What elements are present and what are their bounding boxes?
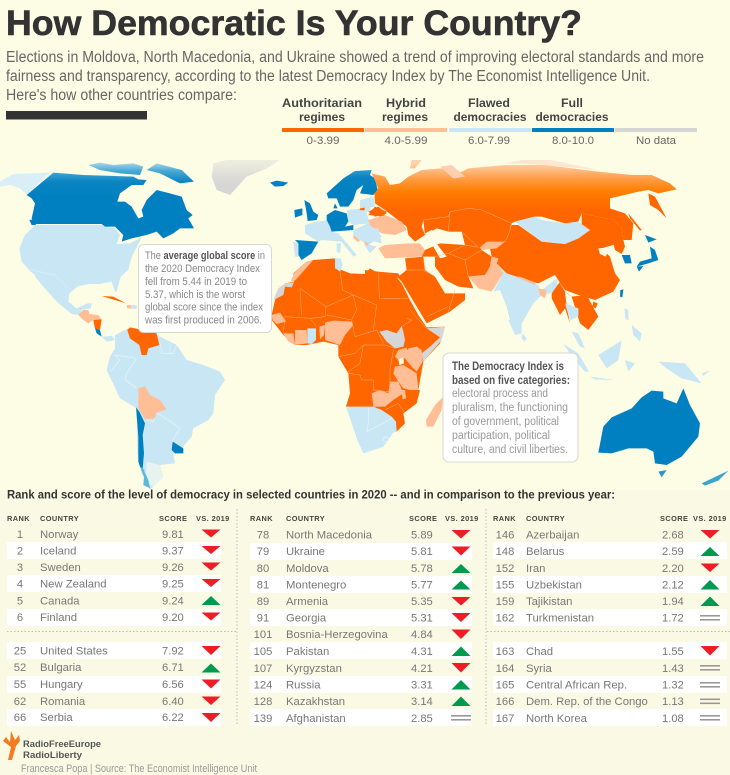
row: Ukraine: 79 xyxy=(257,546,269,558)
row: Finland xyxy=(7,609,221,626)
row: Uzbekistan: 155 xyxy=(496,580,514,592)
row: Bosnia-Herzegovina: Bosnia-Herzegovina xyxy=(286,629,388,641)
row: New Zealand: New Zealand xyxy=(40,578,107,590)
row: Kyrgyzstan xyxy=(254,663,470,675)
row: Ukraine xyxy=(250,543,472,560)
legend: authoritarian regimes: Authoritarian xyxy=(282,98,362,110)
row: Sweden: 3 xyxy=(17,562,23,574)
callout: average global score: fell from 5.44 in 2019 to xyxy=(145,276,247,288)
row: Norway: 1 xyxy=(17,529,23,541)
row: Montenegro: Montenegro xyxy=(286,580,346,592)
legend xyxy=(282,98,697,147)
row: Iran xyxy=(496,563,720,575)
row: Norway: Norway xyxy=(40,529,79,541)
legend: full democracies: democracies xyxy=(536,112,608,124)
row: Belarus: Belarus xyxy=(526,546,565,558)
row: Kazakhstan xyxy=(254,696,470,708)
row: Iran: Iran xyxy=(526,563,545,575)
callout: five categories xyxy=(443,353,578,462)
table column 3 xyxy=(493,514,727,726)
callout: five categories: of government, political xyxy=(452,416,559,428)
row: Central African Rep.: Central African Rep. xyxy=(526,680,627,692)
row: Kyrgyzstan: 4.21 xyxy=(411,663,433,675)
redacted bar xyxy=(6,111,147,120)
legend: flawed democracies: democracies xyxy=(454,112,526,124)
row: Canada: Canada xyxy=(40,596,80,608)
row: North Macedonia: North Macedonia xyxy=(286,530,373,542)
row: Moldova xyxy=(257,563,470,575)
table column 1 xyxy=(7,514,230,726)
row: Dem. Rep. of the Congo: Dem. Rep. of the Congo xyxy=(526,696,648,708)
row: Serbia xyxy=(7,709,221,726)
intro text: Here's how other countries compare: xyxy=(6,87,237,104)
column 1 headers: VS. 2019 xyxy=(196,514,230,523)
row: Azerbaijan: Azerbaijan xyxy=(526,530,579,542)
world map xyxy=(0,160,728,490)
row: Armenia xyxy=(257,596,470,608)
row: North Korea: 167 xyxy=(496,713,514,725)
row: Afghanistan xyxy=(250,709,472,726)
row: United States: 7.92 xyxy=(162,646,184,658)
row: North Korea: 1.08 xyxy=(662,713,684,725)
row: Norway xyxy=(17,529,220,541)
legend: hybrid regimes: regimes xyxy=(382,112,428,124)
column 2 headers: VS. 2019 xyxy=(445,514,479,523)
row: Georgia: 91 xyxy=(257,612,269,624)
callout: average global score: 5.37, which is the worst xyxy=(145,289,245,301)
legend: full democracies: Full xyxy=(561,98,583,110)
row: North Macedonia: 5.89 xyxy=(411,530,433,542)
legend: flawed democracies xyxy=(449,98,531,147)
legend: authoritarian regimes xyxy=(282,98,364,147)
row: Chad xyxy=(493,642,727,659)
row: Armenia: 5.35 xyxy=(411,596,433,608)
row: Tajikistan: 159 xyxy=(496,596,514,608)
row: Dem. Rep. of the Congo: 166 xyxy=(496,696,514,708)
map: South America xyxy=(107,327,225,490)
column 2 headers: COUNTRY xyxy=(286,514,325,523)
column 3 headers: SCORE xyxy=(660,514,688,523)
row: Kazakhstan: 3.14 xyxy=(411,696,433,708)
table column 2 xyxy=(250,514,479,726)
row: Finland: 6 xyxy=(17,612,23,624)
row: Ukraine: 5.81 xyxy=(411,546,433,558)
callout: average global score: was first produced in 2006. xyxy=(144,314,262,326)
legend: no data: No data xyxy=(636,135,677,147)
logo: RFE/RL: RadioFreeEurope xyxy=(23,739,101,750)
row: Iceland: 9.37 xyxy=(162,546,184,558)
column 3 headers xyxy=(493,514,727,523)
column 1 headers: COUNTRY xyxy=(40,514,79,523)
row: Montenegro xyxy=(250,576,472,593)
title: How Democratic Is Your Country? xyxy=(6,4,582,43)
row: Armenia: 89 xyxy=(257,596,269,608)
row: Sweden: 9.26 xyxy=(162,562,184,574)
row: Azerbaijan xyxy=(496,530,720,542)
row: North Macedonia: 78 xyxy=(257,530,269,542)
row: Pakistan: 4.31 xyxy=(411,646,433,658)
callout: five categories: The Democracy Index is xyxy=(452,361,564,373)
intro text xyxy=(6,49,704,104)
row: Bulgaria: Bulgaria xyxy=(40,662,82,674)
column 2 headers: RANK xyxy=(250,514,273,523)
row: Syria xyxy=(496,663,720,675)
row: Pakistan: Pakistan xyxy=(286,646,329,658)
source line: Francesca Popa | Source: The Economist Intelligence Unit xyxy=(21,763,257,775)
row: Azerbaijan: 2.68 xyxy=(662,530,684,542)
callout: five categories: pluralism, the functioning xyxy=(452,402,568,414)
row: Chad: 163 xyxy=(496,646,514,658)
callout: average global score xyxy=(138,244,272,332)
row: Bulgaria: 52 xyxy=(14,662,26,674)
legend: authoritarian regimes: 0-3.99 xyxy=(306,135,340,147)
legend: hybrid regimes: Hybrid xyxy=(386,98,426,110)
row: Syria: 164 xyxy=(496,663,514,675)
row: Bulgaria: 6.71 xyxy=(162,662,184,674)
row: Central African Rep.: 165 xyxy=(496,680,514,692)
map: Greenland and Iceland xyxy=(212,160,288,195)
row: Montenegro: 81 xyxy=(257,580,269,592)
map: North America xyxy=(0,163,194,342)
row: United States: United States xyxy=(40,646,108,658)
column 2 headers: SCORE xyxy=(409,514,437,523)
row: Russia: 3.31 xyxy=(411,680,433,692)
row: New Zealand: 4 xyxy=(17,578,23,590)
row: Bosnia-Herzegovina: 101 xyxy=(254,629,272,641)
row: North Korea: North Korea xyxy=(526,713,588,725)
row: Montenegro: 5.77 xyxy=(411,580,433,592)
row: Russia: 124 xyxy=(254,680,272,692)
row: Azerbaijan: 146 xyxy=(496,530,514,542)
row: Romania: Romania xyxy=(40,696,86,708)
row: North Macedonia xyxy=(257,530,470,542)
callout: average global score: global score since the index xyxy=(145,302,264,314)
row: Iceland: Iceland xyxy=(40,546,76,558)
column 1 headers: SCORE xyxy=(159,514,187,523)
row: Belarus: 2.59 xyxy=(662,546,684,558)
callout: five categories: culture, and civil liberties. xyxy=(452,444,568,456)
callout: average global score: the 2020 Democracy Index xyxy=(145,263,261,275)
row: Kazakhstan: 128 xyxy=(254,696,272,708)
row: Bosnia-Herzegovina: 4.84 xyxy=(411,629,433,641)
column 3 headers: RANK xyxy=(493,514,516,523)
legend: hybrid regimes: 4.0-5.99 xyxy=(384,135,428,147)
row: Pakistan xyxy=(250,642,472,659)
row: Serbia: Serbia xyxy=(40,712,73,724)
legend: hybrid regimes xyxy=(365,98,447,147)
callout: average global score: The average global score in xyxy=(145,250,265,262)
row: Syria: Syria xyxy=(526,663,552,675)
row: Bosnia-Herzegovina xyxy=(254,629,470,641)
row: New Zealand: 9.25 xyxy=(162,578,184,590)
map: Oceania and Southeast Asia xyxy=(508,320,728,486)
callout: five categories: based on five categories: xyxy=(452,375,570,387)
row: Iran: 152 xyxy=(496,563,514,575)
row: United States xyxy=(7,642,221,659)
row: Georgia xyxy=(250,609,472,626)
row: Pakistan: 105 xyxy=(254,646,272,658)
column 1 headers xyxy=(7,514,230,523)
map: Africa xyxy=(272,258,445,453)
row: Hungary xyxy=(7,676,221,693)
row: Canada xyxy=(17,596,220,608)
row: Russia: Russia xyxy=(286,680,321,692)
row: Russia xyxy=(250,676,472,693)
row: Hungary: 6.56 xyxy=(162,679,184,691)
row: Iran: 2.20 xyxy=(662,563,684,575)
row: Dem. Rep. of the Congo: 1.13 xyxy=(662,696,684,708)
row: Kyrgyzstan: 107 xyxy=(254,663,272,675)
row: Turkmenistan: 162 xyxy=(496,612,514,624)
row: Turkmenistan xyxy=(493,609,727,626)
row: Dem. Rep. of the Congo xyxy=(496,696,720,708)
row: Hungary: 55 xyxy=(14,679,26,691)
logo: RFE/RL xyxy=(3,731,101,761)
row: Afghanistan: 139 xyxy=(254,713,272,725)
callout: five categories: electoral process and xyxy=(452,388,548,400)
row: Ukraine: Ukraine xyxy=(286,546,325,558)
row: Belarus xyxy=(493,542,727,559)
row: Moldova: 80 xyxy=(257,563,269,575)
row: Uzbekistan xyxy=(493,576,727,593)
row: Chad: 1.55 xyxy=(662,646,684,658)
row: Romania xyxy=(14,696,220,708)
column 1 headers: RANK xyxy=(7,514,30,523)
row: Canada: 9.24 xyxy=(162,596,184,608)
row: Turkmenistan: 1.72 xyxy=(662,612,684,624)
row: Iceland: 2 xyxy=(17,546,23,558)
logo: RFE/RL: RadioLiberty xyxy=(23,750,83,761)
row: Kazakhstan: Kazakhstan xyxy=(286,696,345,708)
table heading: Rank and score of the level of democracy in selected countries in 2020 -- and in comparison to the previous year: xyxy=(7,490,615,502)
row: Kyrgyzstan: Kyrgyzstan xyxy=(286,663,342,675)
row: Chad: Chad xyxy=(526,646,553,658)
row: Norway: 9.81 xyxy=(162,529,184,541)
legend: authoritarian regimes: regimes xyxy=(299,112,345,124)
row: Serbia: 6.22 xyxy=(162,712,184,724)
legend: no data xyxy=(615,128,697,147)
row: Sweden xyxy=(17,562,220,574)
row: Sweden: Sweden xyxy=(40,562,81,574)
row: Afghanistan: Afghanistan xyxy=(286,713,346,725)
row: North Korea xyxy=(493,709,727,726)
legend: flawed democracies: 6.0-7.99 xyxy=(468,135,510,147)
row: United States: 25 xyxy=(14,646,26,658)
row: Tajikistan: Tajikistan xyxy=(526,596,572,608)
icon: RFE/RL flame xyxy=(3,731,20,760)
legend: full democracies xyxy=(532,98,614,147)
intro text: fairness and transparency, according to the latest Democracy Index by The Economist Intelligence Unit. xyxy=(6,68,650,85)
row: Afghanistan: 2.85 xyxy=(411,713,433,725)
row: Moldova: 5.78 xyxy=(411,563,433,575)
row: Romania: 6.40 xyxy=(162,696,184,708)
row: Iceland xyxy=(7,542,221,559)
row: Uzbekistan: Uzbekistan xyxy=(526,580,582,592)
row: Finland: 9.20 xyxy=(162,612,184,624)
row: Canada: 5 xyxy=(17,596,23,608)
row: Georgia: Georgia xyxy=(286,612,327,624)
row: Tajikistan: 1.94 xyxy=(662,596,684,608)
column 2 headers xyxy=(250,514,479,523)
row: Uzbekistan: 2.12 xyxy=(662,580,684,592)
column 3 headers: COUNTRY xyxy=(526,514,565,523)
row: Moldova: Moldova xyxy=(286,563,329,575)
row: Romania: 62 xyxy=(14,696,26,708)
legend: full democracies: 8.0-10.0 xyxy=(552,135,594,147)
row: Serbia: 66 xyxy=(14,712,26,724)
row: Bulgaria xyxy=(14,662,220,674)
callout: five categories: participation, political xyxy=(452,430,550,442)
row: Armenia: Armenia xyxy=(286,596,329,608)
row: Central African Rep.: 1.32 xyxy=(662,680,684,692)
row: Turkmenistan: Turkmenistan xyxy=(526,612,594,624)
map: Europe xyxy=(293,170,395,260)
row: Georgia: 5.31 xyxy=(411,612,433,624)
row: Central African Rep. xyxy=(493,676,727,693)
map: Russia and Asia xyxy=(365,160,677,330)
legend: flawed democracies: Flawed xyxy=(468,98,510,110)
row: Hungary: Hungary xyxy=(40,679,83,691)
column 3 headers: VS. 2019 xyxy=(693,514,727,523)
row: Syria: 1.43 xyxy=(662,663,684,675)
row: Belarus: 148 xyxy=(496,546,514,558)
row: New Zealand xyxy=(7,575,221,592)
row: Finland: Finland xyxy=(40,612,77,624)
row: Tajikistan xyxy=(496,596,720,608)
